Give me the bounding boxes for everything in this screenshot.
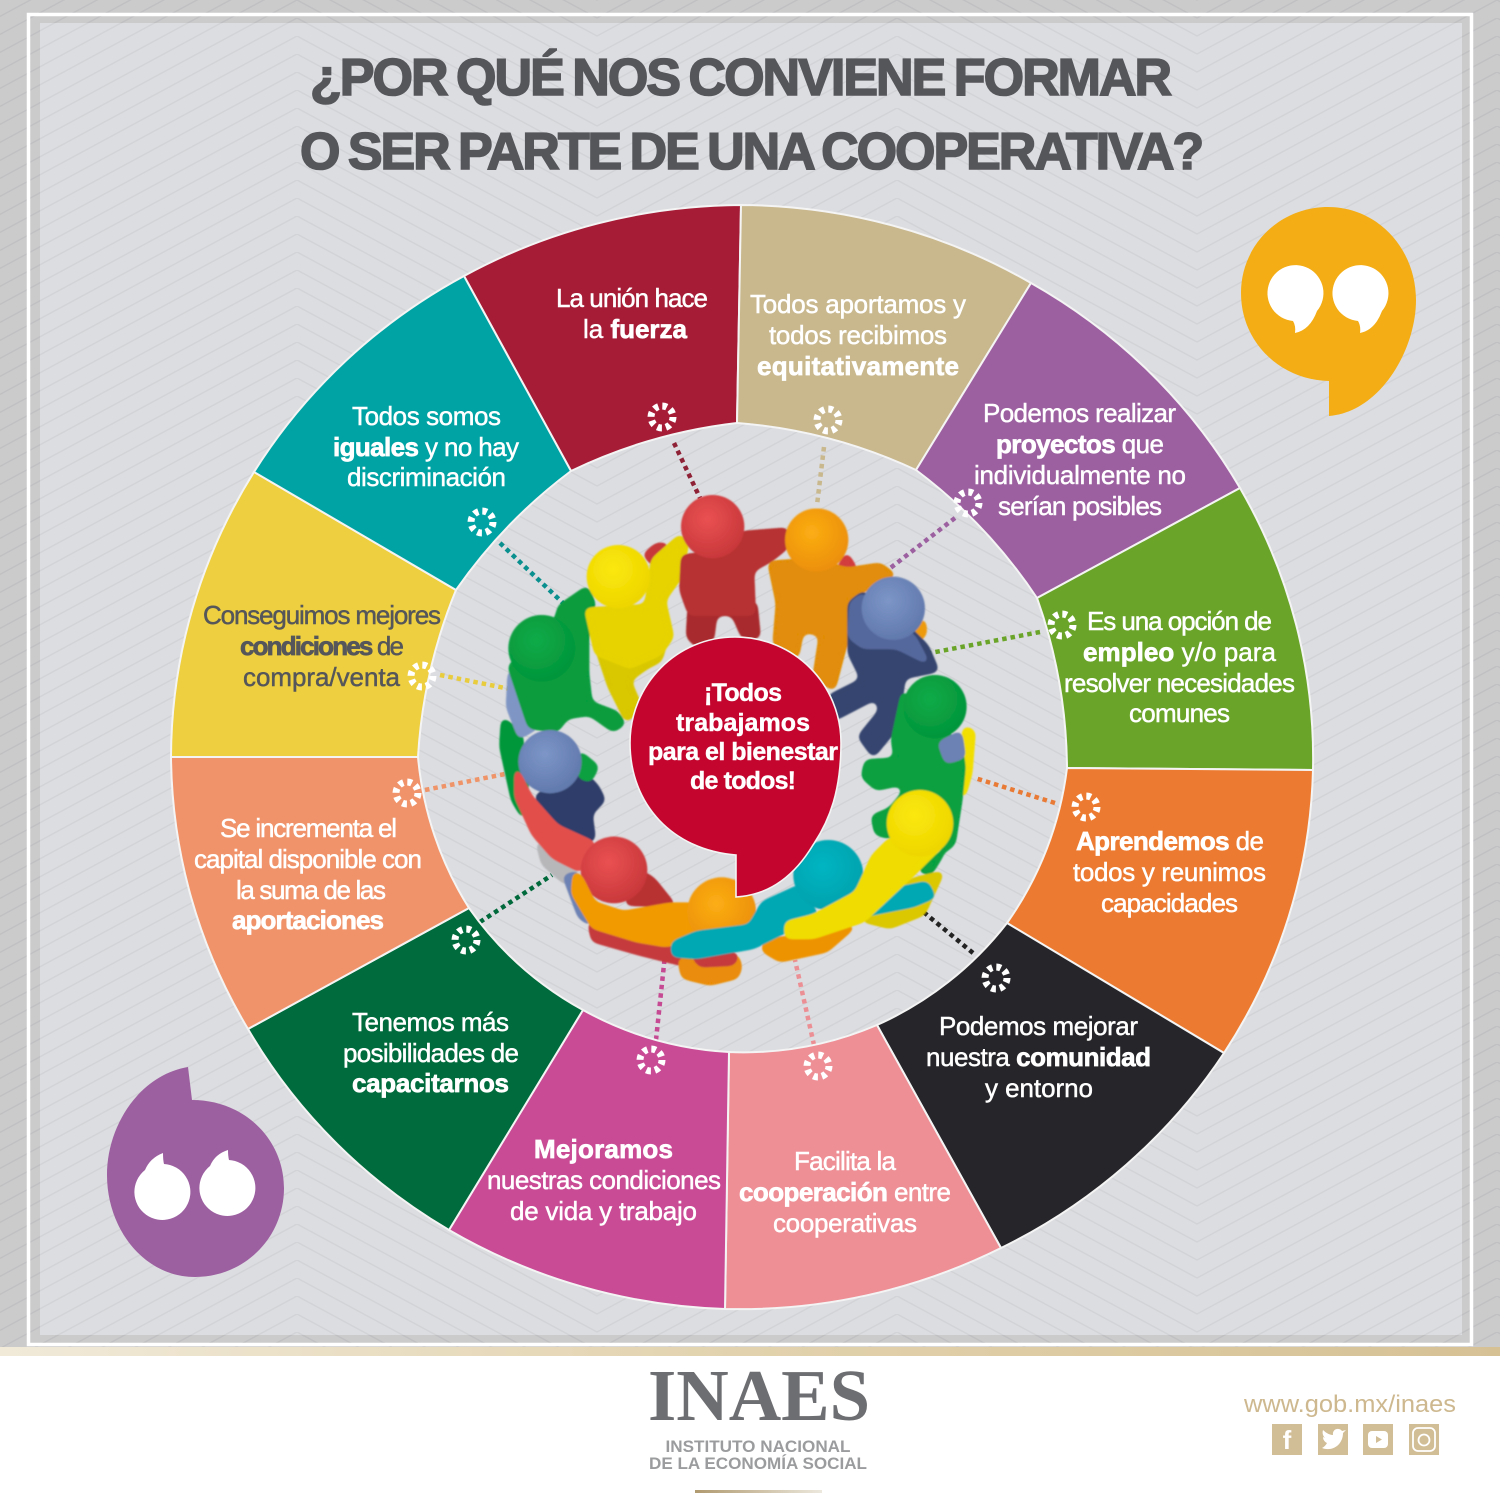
segment: aportaciones: la suma de las [236,875,386,905]
figure: right blue [830,577,937,755]
segment: iguales: iguales y no hay [333,432,519,462]
segment: aportaciones [171,757,469,1029]
segment: la unión hace la fuerza [464,205,741,471]
segment: todos aportamos: equitativamente [757,351,959,381]
segment: la unión hace la fuerza: La unión hace [556,283,708,313]
icon: instagram [1409,1424,1439,1455]
segment: proyectos: individualmente no [974,460,1186,490]
segment: empleo: Es una opción de [1087,606,1272,636]
figure: top orange [770,508,893,688]
segment: empleo: empleo y/o para [1083,637,1277,667]
segment: iguales: discriminación [347,462,506,492]
segment: aportaciones: capital disponible con [194,844,422,874]
segment: proyectos [916,283,1240,598]
INAES logo: INAES [648,1355,870,1436]
segment: iguales: Todos somos [352,401,501,431]
figure: right green [863,675,973,873]
figure: left blue [518,730,603,923]
figure: left green [502,588,623,817]
title: O SER PARTE DE UNA COOPERATIVA? [300,123,1202,181]
wheel of benefits [171,205,1313,1309]
segment: condiciones [171,472,456,757]
segment: capacitarnos [248,908,583,1230]
icon: youtube [1363,1424,1393,1455]
segment: proyectos: serían posibles [998,491,1162,521]
center speech bubble [630,637,841,897]
segment: iguales [254,276,571,590]
figure: top red [681,495,787,645]
segment: comunidad: Podemos mejorar [939,1011,1138,1041]
icon: opening quote marks [134,1150,255,1220]
segment: aprendemos [1007,768,1313,1053]
segment: todos aportamos: todos recibimos [769,320,947,350]
figure: lower right body [763,873,942,960]
INAES logo [648,1355,870,1493]
segment: aprendemos: capacidades [1101,888,1238,918]
segment: empleo [1037,488,1313,770]
website and social icons: www.gob.mx/inaes [1243,1391,1456,1418]
segment: cooperación: Facilita la [794,1146,897,1176]
figure: top yellow [587,537,687,720]
segment: capacitarnos: capacitarnos [352,1068,509,1098]
segment: todos aportamos: Todos aportamos y [750,289,966,319]
icon: twitter [1318,1424,1348,1455]
segment: condiciones: condiciones de [240,631,404,661]
orange quote bubble [1241,207,1416,416]
segment: la unión hace la fuerza: la fuerza [583,314,688,344]
website and social icons [1243,1391,1456,1455]
segment: mejoramos [449,1010,729,1309]
segment: capacitarnos: posibilidades de [343,1038,519,1068]
segment: capacitarnos: Tenemos más [352,1007,509,1037]
segment: empleo: resolver necesidades [1064,668,1295,698]
icon: closing quote marks [1267,265,1388,333]
purple quote bubble [107,1067,284,1277]
segment: mejoramos: de vida y trabajo [510,1196,697,1226]
segment: aportaciones: Se incrementa el [220,813,397,843]
title: ¿POR QUÉ NOS CONVIENE FORMAR [310,49,1172,107]
segment: condiciones: compra/venta [243,662,401,692]
segment: proyectos: proyectos que [996,429,1164,459]
figures in a circle [502,495,973,983]
segment: cooperación: cooperación entre [739,1177,951,1207]
segment: mejoramos: Mejoramos [534,1134,673,1164]
figure: bottom red [517,770,737,963]
figure: right yellow [787,790,953,937]
segment: aprendemos: Aprendemos de [1076,826,1264,856]
center speech bubble: para el bienestar [648,738,838,766]
icon: facebook [1272,1424,1302,1455]
segment: mejoramos: nuestras condiciones [487,1165,721,1195]
center speech bubble: ¡Todos [704,679,782,707]
segment: proyectos: Podemos realizar [983,398,1176,428]
segment: empleo: comunes [1129,698,1230,728]
title [300,49,1202,181]
segment: comunidad [877,923,1224,1248]
INAES logo: INSTITUTO NACIONAL [666,1437,850,1456]
figure: bottom orange [573,873,756,983]
INAES logo: DE LA ECONOMÍA SOCIAL [649,1454,867,1473]
dotted connector lines [425,443,1055,1045]
figure: bottom teal [673,840,933,957]
icon: facebook: f [1283,1425,1292,1455]
center speech bubble: trabajamos [676,709,810,737]
footer band [0,1347,1500,1500]
center speech bubble: de todos! [690,767,796,795]
segment: aprendemos: todos y reunimos [1073,857,1266,887]
segment: aportaciones: aportaciones [232,905,384,935]
segment: cooperación [725,1025,1001,1309]
segment: comunidad: nuestra comunidad [926,1042,1151,1072]
segment: todos aportamos [737,205,1031,470]
segment: condiciones: Conseguimos mejores [203,600,441,630]
segment: cooperación: cooperativas [773,1208,917,1238]
segment: comunidad: y entorno [985,1073,1093,1103]
